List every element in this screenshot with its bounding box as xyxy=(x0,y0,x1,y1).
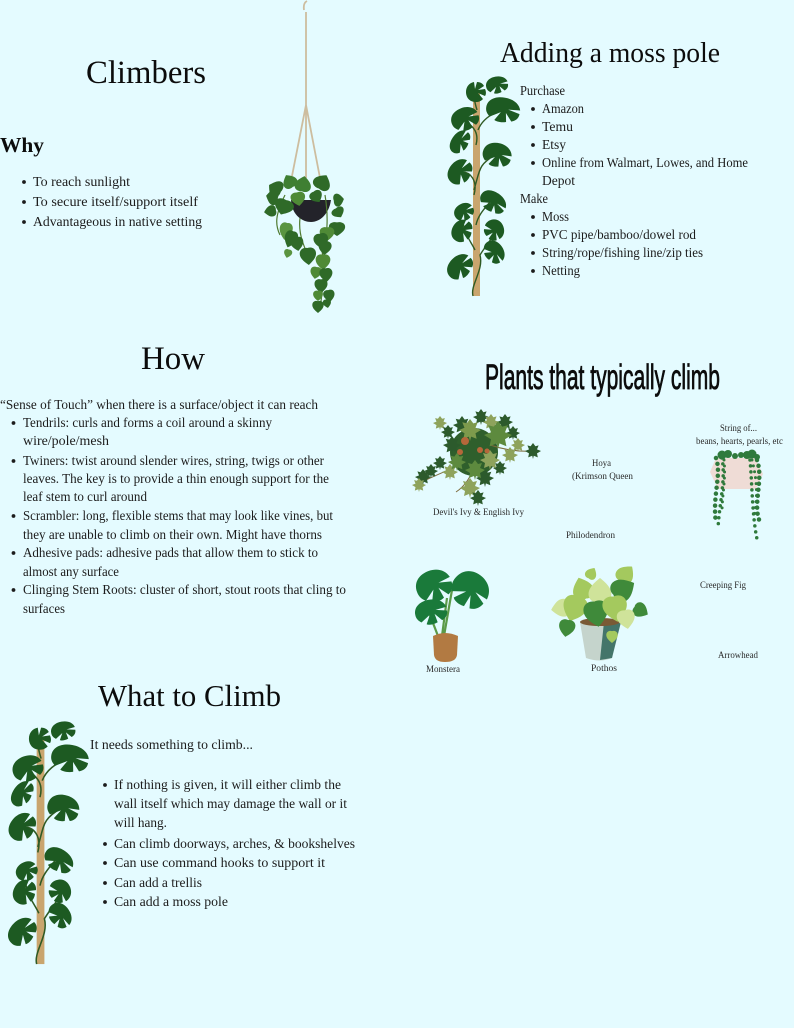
label: Philodendron: Philodendron xyxy=(566,531,615,541)
list: purchase and make options: Depot xyxy=(542,173,575,188)
label: Hoya: (Krimson Queen xyxy=(572,471,633,482)
list: why plants climb: Advantageous in native setting xyxy=(33,214,202,229)
label: Creeping Fig: Creeping Fig xyxy=(700,581,746,591)
list: purchase and make options: Amazon xyxy=(542,101,584,116)
list: purchase and make options: Etsy xyxy=(542,137,566,152)
list: purchase and make options: PVC pipe/bamboo/dowel rod xyxy=(542,227,696,242)
text block: what to climb: will hang. xyxy=(114,815,167,830)
label: Hoya: Hoya xyxy=(592,459,612,469)
text block: how plants climb: almost any surface xyxy=(23,564,119,579)
heading: What to Climb: What to Climb xyxy=(98,678,281,713)
text block: what to climb: Can add a trellis xyxy=(114,875,202,890)
illustration: potted pothos xyxy=(550,561,651,660)
list: purchase and make options: Make xyxy=(520,191,548,206)
text block: what to climb: It needs something to climb... xyxy=(90,737,253,752)
label: String of...: String of... xyxy=(720,423,757,434)
illustration: string of pearls xyxy=(710,450,763,539)
label: Arrowhead: Arrowhead xyxy=(718,651,758,661)
list: purchase and make options: Moss xyxy=(542,209,569,224)
list: purchase and make options xyxy=(520,83,748,278)
text block: what to climb: Can use command hooks to support it xyxy=(114,855,325,870)
list: why plants climb: To reach sunlight xyxy=(33,174,130,189)
label: String of... xyxy=(696,423,783,447)
heading: How: How xyxy=(141,341,205,377)
list: purchase and make options: Netting xyxy=(542,263,580,278)
heading: Adding a moss pole: Adding a moss pole xyxy=(500,38,720,69)
illustration: ivy xyxy=(412,409,541,506)
illustration: potted monstera xyxy=(412,564,496,662)
text block: what to climb: Can climb doorways, arches, & bookshelves xyxy=(114,836,355,851)
label: Hoya xyxy=(572,459,633,482)
text block: how plants climb: Adhesive pads: adhesive pads that allow them to stick to xyxy=(23,545,318,560)
list: purchase and make options: String/rope/fishing line/zip ties xyxy=(542,245,703,260)
title: Climbers: Climbers xyxy=(86,55,206,91)
label: Devil's Ivy & English Ivy: Devil's Ivy & English Ivy xyxy=(433,508,524,518)
label: Monstera: Monstera xyxy=(426,665,461,675)
text block: how plants climb: Twiners: twist around slender wires, string, twigs or other xyxy=(23,453,324,468)
text block: how plants climb: Clinging Stem Roots: cluster of short, stout roots that cling to xyxy=(23,582,346,597)
list: purchase and make options: Purchase xyxy=(520,83,565,98)
text block: how plants climb: surfaces xyxy=(23,601,65,616)
text block: how plants climb: leaves. The key is to provide a thin enough support for the xyxy=(23,471,329,486)
text block: how plants climb xyxy=(0,397,346,616)
list: purchase and make options: Online from Walmart, Lowes, and Home xyxy=(542,155,748,170)
list: purchase and make options: Temu xyxy=(542,119,573,134)
text block: how plants climb: leaf stem to curl around xyxy=(23,489,147,504)
label: String of...: beans, hearts, pearls, etc xyxy=(696,437,783,447)
text block: what to climb: Can add a moss pole xyxy=(114,894,228,909)
list: why plants climb: To secure itself/support itself xyxy=(33,194,199,209)
text block: what to climb xyxy=(90,737,355,909)
heading: Why: Why xyxy=(0,133,44,157)
illustration: moss pole plant (top) xyxy=(442,75,522,296)
text block: how plants climb: Tendrils: curls and forms a coil around a skinny xyxy=(23,415,272,430)
illustration: hanging pothos xyxy=(263,1,347,313)
illustration: moss pole plant (bottom) xyxy=(3,720,91,964)
text block: how plants climb: wire/pole/mesh xyxy=(23,433,109,448)
text block: how plants climb: “Sense of Touch” when there is a surface/object it can reach xyxy=(0,397,318,412)
text block: what to climb: wall itself which may damage the wall or it xyxy=(114,796,347,811)
text block: how plants climb: Scrambler: long, flexible stems that may look like vines, but xyxy=(23,508,333,523)
text block: what to climb: If nothing is given, it will either climb the xyxy=(114,777,341,792)
text block: how plants climb: they are unable to climb on their own. Might have thorns xyxy=(23,527,322,542)
list: why plants climb xyxy=(22,174,202,229)
label: Pothos: Pothos xyxy=(591,664,617,674)
